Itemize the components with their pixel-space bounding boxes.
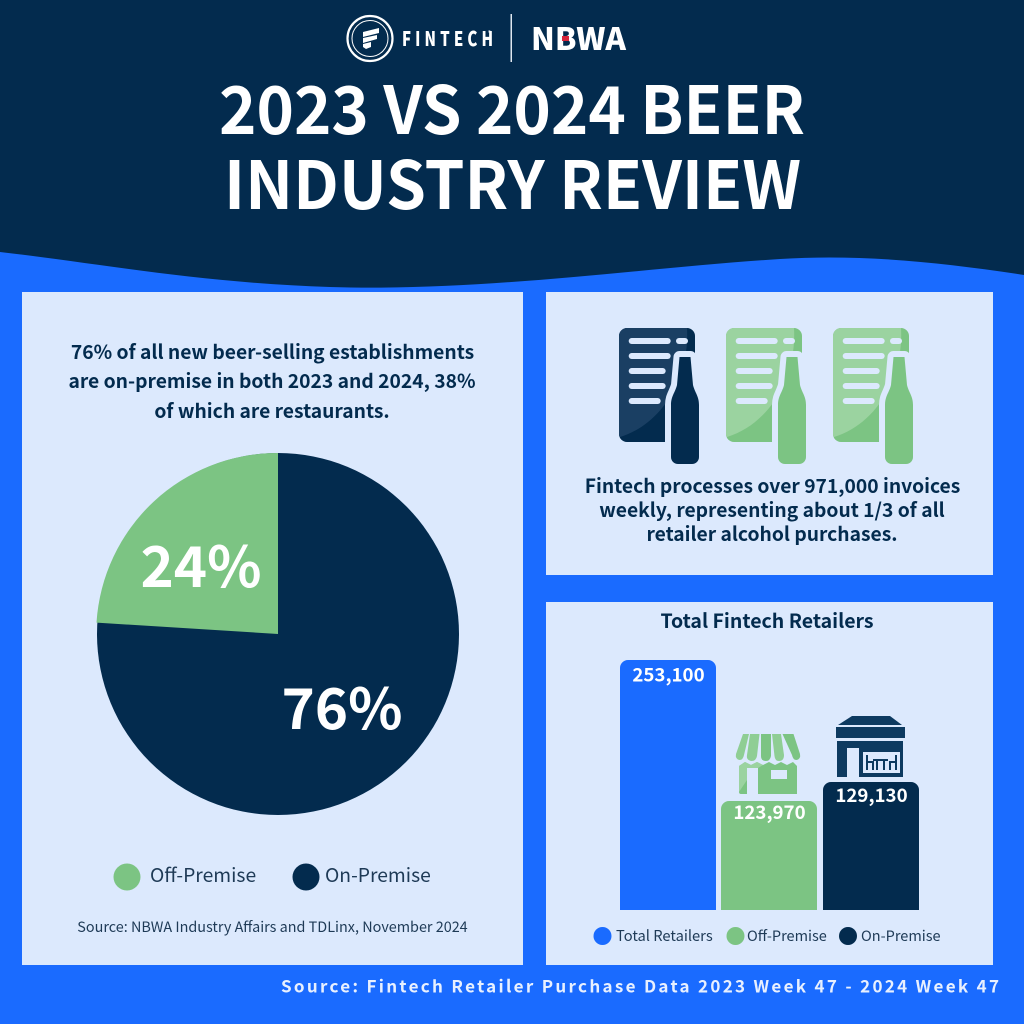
icon: invoice and bottle green 2 [833,328,913,464]
pie chart: 76% [281,664,403,746]
chart title: Total Fintech Retailers [660,605,874,634]
panel text: invoices: retailer alcohol purchases. [646,519,898,547]
panel text: on-premise summary: 76% of all new beer-selling establishments [71,337,474,365]
pie legend: On-Premise [325,860,431,888]
panel text: invoices: Fintech processes over 971,000 invoices [585,471,960,499]
logo: Fintech [348,16,497,61]
pie legend [114,860,431,890]
icon: invoice and bottle green 1 [726,328,806,464]
panel text: on-premise summary: of which are restaurants. [154,396,390,424]
store awning stripes [736,734,800,761]
footer source: Source: Fintech Retailer Purchase Data 2023 Week 47 - 2024 Week 47 [281,972,999,998]
pie legend: Off-Premise [150,860,256,888]
title [219,58,805,229]
pie chart [96,453,459,815]
pie chart: 24% [140,522,262,604]
panel text: invoices: weekly, representing about 1/3 of all [599,495,945,523]
panel text: invoices [585,471,960,547]
icon: invoice and bottle navy [619,328,699,464]
panel: invoices [546,292,993,575]
bar: total retailers [620,660,716,910]
bar: on-premise [823,781,919,910]
logo: Fintech: ® [488,28,491,37]
icon: restaurant [836,716,905,777]
panel text: on-premise summary: are on-premise in both 2023 and 2024, 38% [68,366,476,394]
chart legend: Off-Premise [747,925,827,946]
chart legend: On-Premise [861,925,941,946]
bar: on-premise: 129,130 [835,781,908,808]
bar: off-premise [721,798,817,910]
icon: store [736,734,800,794]
header band [0,0,1024,288]
panel text: on-premise summary [68,337,476,424]
logo divider [510,14,512,62]
source note: Source: NBWA Industry Affairs and TDLinx, November 2024 [77,916,468,937]
bar: off-premise: 123,970 [733,798,806,825]
bar: total retailers: 253,100 [632,660,705,688]
panel: total retailers [546,602,993,965]
chart legend: Total Retailers [616,925,713,946]
title: INDUSTRY REVIEW [224,133,801,229]
title: 2023 VS 2024 BEER [219,58,805,154]
logo: NBWA: NBWA [531,14,627,59]
chart legend [594,925,941,946]
panel: on-premise share [22,292,523,965]
logo: Fintech: FINTECH [402,25,497,53]
